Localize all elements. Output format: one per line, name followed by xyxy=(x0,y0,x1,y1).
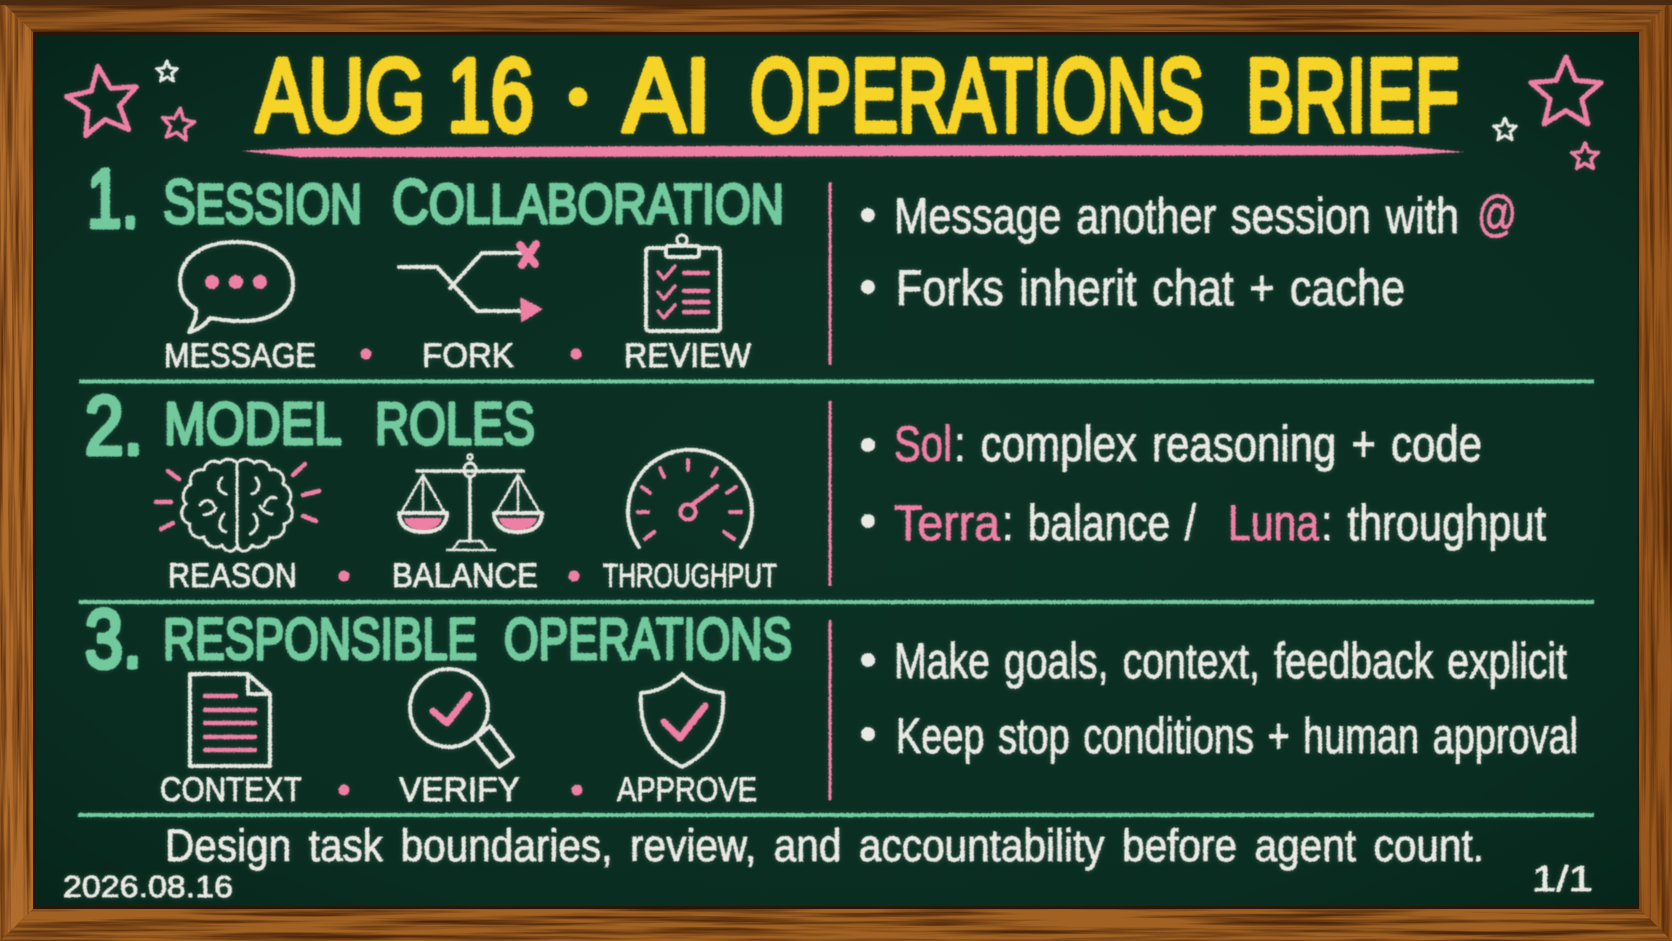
icon: magnifier xyxy=(410,669,513,767)
heading: responsible operations xyxy=(163,607,792,672)
bullet text: model roles: : balance / xyxy=(1002,495,1196,551)
title: AI xyxy=(623,38,711,154)
bullet text: model roles xyxy=(861,416,1546,551)
label throughput: THROUGHPUT xyxy=(603,557,777,594)
bullet text: session collaboration: Message another session with xyxy=(894,188,1459,244)
heading number 3: 3. xyxy=(85,592,142,685)
bullet text: session collaboration: Forks inherit chat + cache xyxy=(896,260,1405,316)
bullet text: model roles: Luna xyxy=(1228,495,1319,551)
label reason: REASON xyxy=(168,557,297,595)
bullet text: responsible operations xyxy=(861,633,1578,764)
bullet text: model roles: : complex reasoning + code xyxy=(954,416,1482,472)
bullet text: model roles: Terra xyxy=(894,495,1000,551)
date: 2026.08.16 xyxy=(63,869,233,904)
title underline xyxy=(241,145,1465,157)
title: OPERATIONS xyxy=(750,38,1204,154)
label message: MESSAGE xyxy=(164,337,316,375)
divider xyxy=(828,401,832,586)
icon: balance scale xyxy=(399,454,542,550)
heading: session collaboration xyxy=(163,168,784,237)
label fork: FORK xyxy=(422,337,514,375)
heading: responsible operations: OPERATIONS xyxy=(504,607,792,672)
page number: 1/1 xyxy=(1532,858,1593,899)
panel: responsible operations xyxy=(85,592,1578,809)
heading: session collaboration: SESSION xyxy=(163,168,362,237)
icon: clipboard xyxy=(646,235,720,331)
bullet text: model roles: : throughput xyxy=(1321,495,1546,551)
footer message: Design task boundaries, review, and accountability before agent count. xyxy=(165,820,1484,871)
panel: model roles xyxy=(85,379,1546,595)
divider xyxy=(828,182,832,365)
panel: session collaboration xyxy=(87,152,1517,375)
title: BRIEF xyxy=(1246,38,1459,154)
heading: responsible operations: RESPONSIBLE xyxy=(163,607,477,672)
icon: shield xyxy=(641,674,723,767)
icon: brain xyxy=(156,459,319,551)
bullet text: session collaboration xyxy=(861,186,1517,316)
title xyxy=(256,38,1459,154)
divider xyxy=(828,620,832,800)
heading: model roles: ROLES xyxy=(375,391,535,457)
heading: model roles xyxy=(164,391,535,457)
label verify: VERIFY xyxy=(399,771,520,809)
heading: model roles: MODEL xyxy=(164,391,342,457)
heading number 1: 1. xyxy=(87,152,139,245)
label context: CONTEXT xyxy=(160,771,302,809)
label review: REVIEW xyxy=(624,337,751,375)
icon: gauge xyxy=(628,450,752,547)
heading: session collaboration: COLLABORATION xyxy=(392,168,784,237)
label approve: APPROVE xyxy=(617,771,757,809)
decorative stars xyxy=(63,57,1601,168)
heading number 2: 2. xyxy=(85,379,143,472)
icon: document xyxy=(190,674,270,766)
icon: message bubble xyxy=(180,242,293,332)
label balance: BALANCE xyxy=(392,557,538,595)
title: AUG 16 xyxy=(256,38,534,154)
bullet text: model roles: Sol xyxy=(894,416,952,472)
icon: fork xyxy=(399,244,543,323)
bullet text: session collaboration: @ xyxy=(1477,186,1517,242)
